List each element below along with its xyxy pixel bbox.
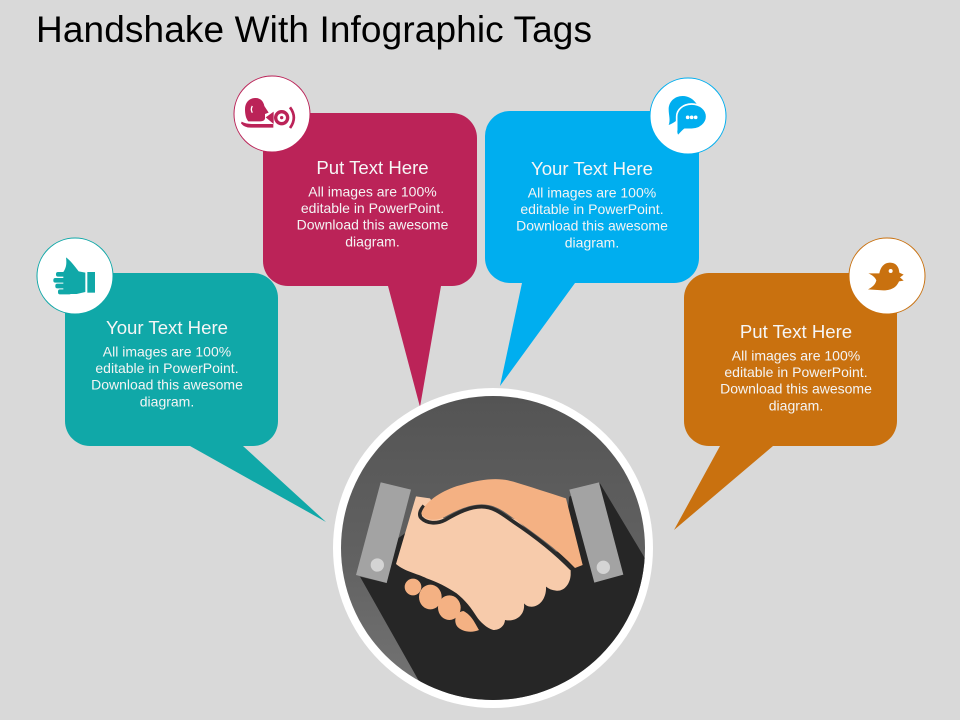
text block: teal bubble: Download this awesome — [91, 377, 243, 393]
text block: blue bubble: diagram. — [565, 234, 619, 250]
text block: orange bubble: editable in PowerPoint. — [724, 364, 868, 380]
heading: blue bubble: Your Text Here — [531, 158, 653, 179]
text block: orange bubble: All images are 100% — [732, 348, 860, 364]
text block: blue bubble: All images are 100% — [528, 184, 656, 200]
panel: orange speech bubble — [674, 273, 897, 530]
handshake illustration — [356, 479, 623, 632]
handshake medallion — [333, 388, 663, 718]
panel: crimson speech bubble — [263, 113, 477, 407]
text block: blue bubble: editable in PowerPoint. — [520, 201, 664, 217]
heading: teal bubble: Your Text Here — [106, 317, 228, 338]
icon: bird — [849, 238, 925, 314]
left cuff — [356, 482, 411, 583]
panel: teal speech bubble — [65, 273, 326, 522]
icon: speaking head with sound — [234, 76, 310, 152]
heading: orange bubble: Put Text Here — [740, 321, 852, 342]
text block: crimson bubble: editable in PowerPoint. — [301, 200, 444, 216]
text block: orange bubble: Download this awesome — [720, 381, 872, 397]
heading: crimson bubble: Put Text Here — [316, 157, 429, 178]
text block: teal bubble: diagram. — [140, 393, 194, 409]
light hand — [396, 496, 571, 630]
panel: blue speech bubble — [485, 111, 699, 386]
text block: teal bubble: All images are 100% — [103, 344, 231, 360]
icon: chat bubbles — [650, 78, 726, 154]
text block: crimson bubble: Download this awesome — [297, 217, 449, 233]
text block: blue bubble: Download this awesome — [516, 218, 668, 234]
icon: thumbs up — [37, 238, 113, 314]
separating line — [420, 506, 572, 569]
text block: orange bubble: diagram. — [769, 397, 823, 413]
text block: crimson bubble: All images are 100% — [308, 184, 437, 200]
title: Handshake With Infographic Tags — [36, 9, 592, 50]
text block: crimson bubble: diagram. — [345, 233, 400, 249]
long shadow — [360, 484, 645, 700]
fingers — [405, 579, 421, 595]
text block: teal bubble: editable in PowerPoint. — [95, 360, 239, 376]
dark hand — [421, 479, 583, 568]
right cuff — [569, 482, 623, 583]
